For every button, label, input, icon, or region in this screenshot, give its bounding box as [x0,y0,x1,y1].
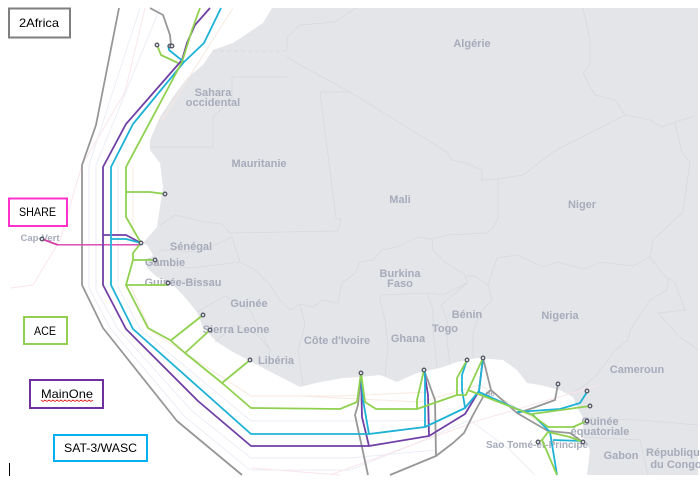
map labels: Côte d'Ivoire [304,335,370,347]
map labels: Sénégal [170,241,212,253]
cable: ACE (green) [126,8,590,475]
legend: MainOne [30,380,103,408]
map labels: Libéria [258,355,295,367]
country borders [150,8,698,475]
map labels: Guinée-Bissau [144,277,222,289]
map labels: Guinée [581,416,619,428]
map labels: Algérie [453,38,491,50]
cable: SHARE (pink) [42,239,141,245]
legend: SAT-3/WASC: SAT-3/WASC [64,441,137,455]
legend: ACE [24,317,67,344]
legend: SHARE [9,198,67,226]
land mass [143,8,698,475]
legend: SHARE: SHARE [19,205,56,219]
map labels: Gabon [604,450,639,462]
map labels: Gambie [145,257,185,269]
legend: ACE: ACE [34,324,56,338]
map labels: Burkina [380,268,421,280]
cable: SAT-3/WASC (blue) [111,8,587,475]
map labels: Sahara [195,87,232,99]
cable: MainOne (purple) [103,8,483,446]
map labels: équatoriale [571,426,629,438]
map labels: Niger [568,199,597,211]
map labels: Cameroun [610,364,664,376]
map labels: Nigeria [541,310,580,322]
map labels: Sierra Leone [203,324,269,336]
map labels: Mauritanie [231,158,287,170]
text cursor [9,463,10,476]
map labels: Sao Tomé-et-Principe [486,440,588,451]
map labels: Togo [432,323,458,335]
map labels: Mali [389,194,411,206]
map labels: Ghana [391,333,426,345]
map labels: occidental [186,97,240,109]
legend: 2Africa: 2Africa [19,16,59,30]
map labels: Guinée [230,298,268,310]
map labels: Cap-Vert [20,233,60,244]
map labels: de [485,389,495,398]
legend: SAT-3/WASC [54,435,147,461]
cable: 2Africa (grey) [82,8,583,475]
landing stations [40,43,592,444]
map labels: Faso [387,278,413,290]
legend: MainOne: MainOne [41,387,93,401]
map labels: Bénin [452,309,483,321]
legend: 2Africa [9,8,70,38]
